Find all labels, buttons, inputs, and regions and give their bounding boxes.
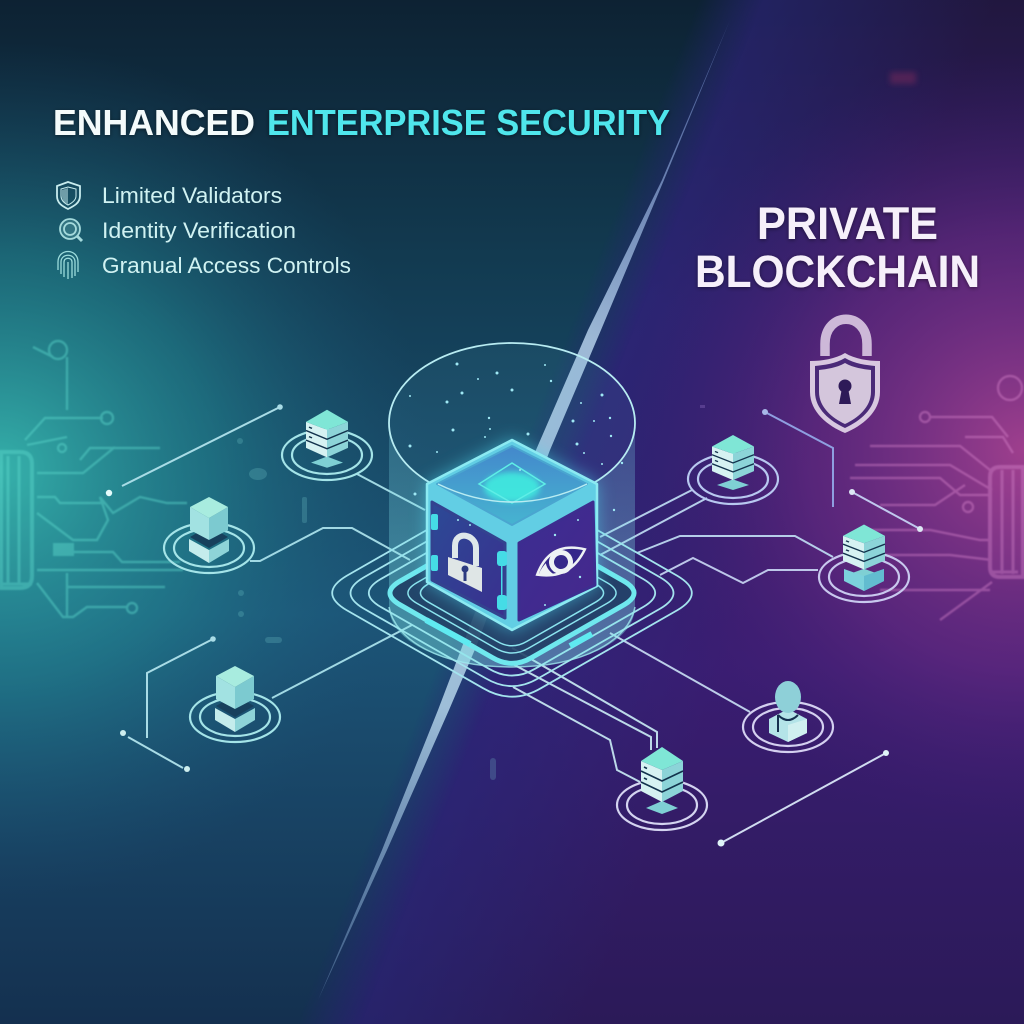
title: enhanced enterprise security <box>53 102 670 143</box>
nodes <box>164 410 909 830</box>
trace: person node link <box>610 633 750 712</box>
item: identity verification: Identity Verification <box>102 218 296 243</box>
trace: right server lower link <box>660 558 818 583</box>
connection traces <box>250 474 833 782</box>
glass cylinder <box>389 423 635 667</box>
icon: padlock shield <box>810 319 880 433</box>
title: enhanced enterprise security: ENTERPRISE SECURITY <box>267 102 670 143</box>
icon: fingerprint <box>58 252 78 279</box>
trace: right server link <box>637 536 833 557</box>
eye on right face <box>532 539 590 584</box>
trace: lower-left cube node <box>272 625 412 698</box>
cube top face <box>437 446 587 525</box>
node: right server <box>819 524 909 602</box>
cube glow <box>426 438 598 632</box>
divider beam <box>318 20 730 1000</box>
trace: upper-right server links <box>600 490 707 555</box>
cube left face <box>432 502 505 618</box>
platform inner rings <box>408 533 616 653</box>
node: lower-left cube <box>190 666 280 742</box>
platform edge highlights <box>426 620 592 646</box>
title: private blockchain: BLOCKCHAIN <box>695 246 980 297</box>
node: left cube <box>164 497 254 573</box>
node: upper-right server <box>688 435 778 504</box>
trace: top-left server <box>357 474 425 510</box>
cube right face <box>519 502 595 620</box>
item: limited validators: Limited Validators <box>102 183 282 208</box>
decorative circuit right <box>850 376 1023 620</box>
title: private blockchain: PRIVATE <box>757 198 938 249</box>
title: private blockchain <box>695 198 980 297</box>
platform <box>390 523 634 663</box>
item: granular access controls: Granual Access Controls <box>102 253 351 278</box>
cube top glow <box>484 472 540 502</box>
icon: shield <box>57 182 80 209</box>
trace: left cube node <box>250 528 410 561</box>
cube frame <box>427 440 597 630</box>
node: top-left server <box>282 410 372 480</box>
lid front arc <box>438 484 587 502</box>
node: person <box>743 681 833 752</box>
trace: bottom server links <box>505 648 657 782</box>
title: enhanced enterprise security: ENHANCED <box>53 102 255 143</box>
feature list <box>57 182 351 279</box>
cube connectors <box>431 514 507 610</box>
faint background details <box>237 405 705 780</box>
cube top inset <box>479 463 545 503</box>
decorative circuit left <box>1 341 187 617</box>
isolated line segments <box>106 404 923 846</box>
icon: magnifier <box>60 219 82 241</box>
central platform concentric traces <box>332 489 692 697</box>
particles <box>408 362 623 606</box>
padlock on left face <box>448 536 482 592</box>
cylinder base arc <box>389 607 635 667</box>
node: bottom server <box>617 747 707 830</box>
cylinder lid <box>389 343 635 503</box>
central vault <box>389 343 635 667</box>
